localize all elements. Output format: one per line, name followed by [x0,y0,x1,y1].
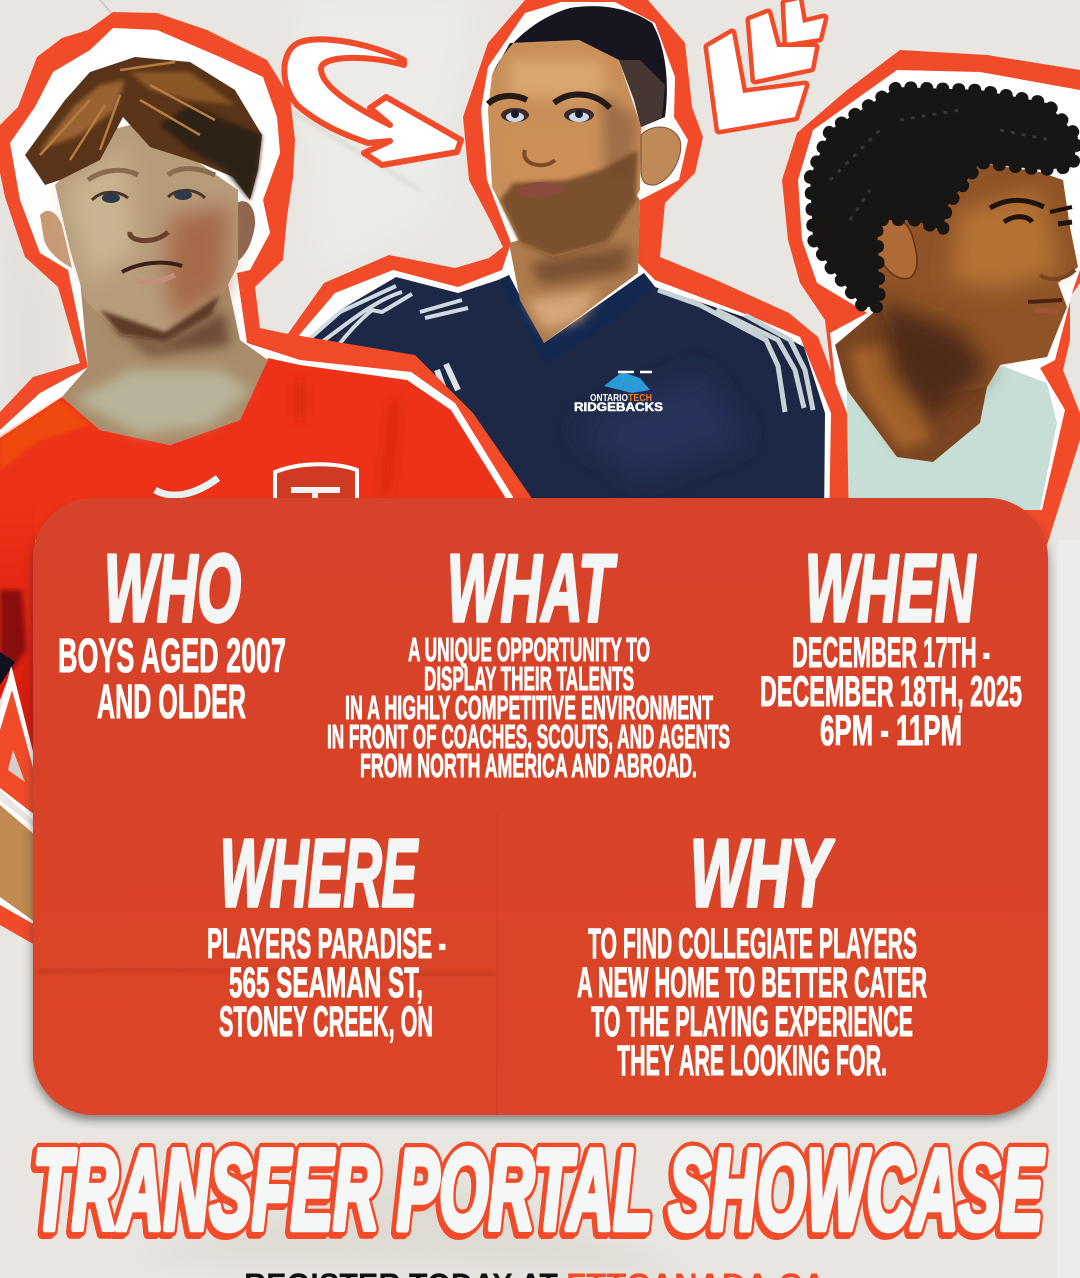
face centre [488,40,641,257]
what section [327,535,730,784]
facial features left [88,169,215,282]
panel shadow [33,506,1048,1120]
text: where body: 565 SEAMAN ST, [229,959,423,1007]
sticker white right [798,70,1080,510]
sticker white centre [290,2,831,530]
facial features right [990,200,1075,312]
where section [207,820,446,1046]
text: why body [577,920,927,1085]
sticker outline left [0,12,535,540]
hair right [810,87,1078,307]
crest left [275,464,357,540]
icon: curved arrow [284,39,461,165]
neck right [835,307,1000,462]
icon: triple chevrons [708,0,824,130]
text: who body: AND OLDER [97,676,246,729]
ear left [40,211,72,268]
text: when body [760,629,1022,755]
ear right side left player [232,201,255,265]
jersey stripes right [658,290,813,412]
player centre [280,0,849,530]
hair left [25,57,262,200]
sticker outline centre [280,0,849,530]
text: who body: BOYS AGED 2007 [58,630,286,683]
badge: Ontario Tech Ridgebacks: TECH [628,392,652,404]
ear right [875,217,917,279]
when section [760,535,1022,755]
neck left [62,270,268,445]
ear centre [641,127,681,185]
badge: Ontario Tech Ridgebacks [574,372,663,414]
jersey centre [300,273,825,530]
text: what body: FROM NORTH AMERICA AND ABROAD. [360,747,697,784]
heading: why: WHY [690,820,835,927]
text: where body [207,920,446,1046]
register line [244,1267,826,1278]
jersey stripes left [305,286,468,347]
sticker white left [0,28,520,540]
face left [55,125,238,340]
nose and mouth centre [524,150,555,165]
neck centre [509,195,640,343]
badge: Ontario Tech Ridgebacks: ONTARIO [590,392,628,404]
text: what body: DISPLAY THEIR TALENTS [424,660,634,697]
heading: where: WHERE [220,820,419,927]
Puma logo [155,478,218,495]
text: what body [327,631,730,784]
right eye [564,108,594,122]
text: what body: IN A HIGHLY COMPETITIVE ENVIRONMENT [345,689,713,726]
heading: who: WHO [104,535,241,642]
left eye [501,108,529,122]
face right [877,163,1078,400]
who section [58,535,286,729]
eyes centre [488,94,610,108]
text: what body: A UNIQUE OPPORTUNITY TO [408,631,650,668]
jersey left [0,358,510,540]
badge: Ontario Tech Ridgebacks: RIDGEBACKS [574,400,663,414]
collar centre [500,273,655,364]
beard centre [500,150,638,257]
hair centre [492,6,667,127]
left arm area below jersey [0,497,35,945]
heading: what: WHAT [447,535,617,642]
player right [782,50,1080,545]
text: what body: IN FRONT OF COACHES, SCOUTS, AND AGENTS [327,718,730,755]
shirt right [847,365,1057,510]
adidas mark [437,364,458,392]
text: when body: 6PM - 11PM [820,707,962,755]
text: where body: PLAYERS PARADISE - [207,920,446,968]
text: who body [58,630,286,729]
text: where body: STONEY CREEK, ON [219,998,433,1046]
player left [0,12,535,540]
sticker outline right [782,50,1080,545]
why section [577,820,927,1085]
info panel [33,498,1048,1115]
